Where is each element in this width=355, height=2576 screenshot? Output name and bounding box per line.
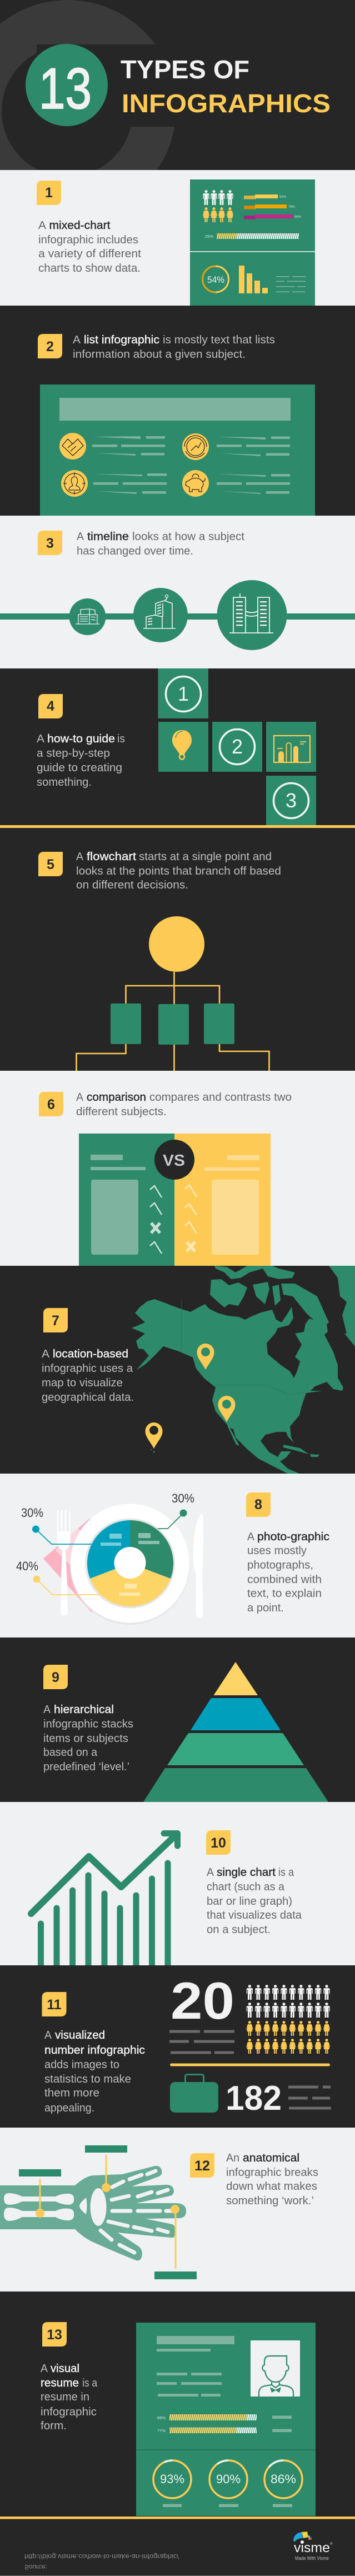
description 8: A [247, 1531, 255, 1543]
description 7: location-based [53, 1348, 128, 1360]
timeline node: medium building [133, 588, 188, 642]
description 8: text, to explain [247, 1587, 322, 1600]
description 10 [207, 1866, 302, 1936]
description 1 [38, 219, 141, 274]
description 11: adds images to [44, 2059, 119, 2071]
description 13: visual [51, 2363, 79, 2375]
description 4: something. [37, 776, 92, 788]
resume panel [136, 2323, 316, 2516]
horizontal bars: 78% [288, 206, 296, 209]
comparison panel right [174, 1134, 271, 1266]
description 5: starts at a single point and [139, 851, 272, 863]
description 12 [226, 2152, 318, 2207]
description 8: uses mostly [247, 1545, 307, 1557]
title: INFOGRAPHICS [122, 89, 331, 118]
callout hand [85, 2145, 127, 2192]
section 1: mixed chart [0, 170, 355, 306]
section 7: location-based [0, 1266, 355, 1474]
description 2: is mostly text that lists [163, 334, 275, 346]
badge 1: 1 [45, 185, 53, 201]
callout 30 percent left [21, 1506, 92, 1544]
description 4: is [117, 733, 125, 745]
ring 90 percent [202, 2453, 254, 2507]
description 7: geographical data. [42, 1391, 134, 1404]
step tile 1: 1 [178, 682, 189, 705]
description 13: form. [41, 2420, 67, 2432]
badge 4 [38, 694, 63, 718]
description 13: resume in [41, 2391, 89, 2403]
badge 6 [39, 1092, 63, 1116]
badge 3: 3 [46, 536, 54, 551]
description 10: single chart [217, 1866, 276, 1879]
description 13: A [41, 2363, 48, 2375]
description 1: charts to show data. [38, 262, 141, 274]
step tile 2: 2 [232, 735, 243, 758]
description 3: looks at how a subject [132, 531, 244, 543]
timeline node: small building [69, 598, 106, 635]
callout 30 percent right [158, 1491, 194, 1529]
callout finger [154, 2205, 197, 2279]
hatched progress bar [205, 233, 299, 239]
ring 86 percent [257, 2453, 310, 2507]
badge 10: 10 [211, 1835, 226, 1851]
map pin 3 [146, 1422, 162, 1449]
badge 7 [43, 1308, 68, 1332]
list panel [40, 385, 315, 516]
section 13: visual resume [0, 2292, 355, 2576]
section 10: single chart [0, 1802, 355, 1978]
description 1: a variety of different [38, 248, 141, 260]
step tile 1 [158, 668, 208, 718]
description 7 [42, 1348, 134, 1404]
callout 40 percent [16, 1559, 100, 1595]
badge 6: 6 [47, 1097, 55, 1112]
description 2: information about a given subject. [73, 348, 246, 361]
description 4: guide to creating [37, 762, 122, 774]
big number 20: 20 [171, 1971, 234, 2030]
description 11: number infographic [44, 2044, 145, 2056]
text placeholder lines right [288, 2086, 331, 2109]
description 9: hierarchical [54, 1704, 114, 1716]
description 2 [73, 334, 275, 361]
comparison panel left [79, 1134, 174, 1266]
section 4: how-to guide [0, 668, 355, 828]
section 3: timeline [0, 516, 355, 668]
badge 3 [38, 531, 62, 555]
description 10: on a subject. [207, 1924, 271, 1936]
description 12: infographic breaks [226, 2166, 318, 2179]
mirrored source text: http://blog.visme.co/how-to-make-an-infographic/ [24, 2553, 179, 2560]
description 11: statistics to make [44, 2073, 131, 2085]
description 1: infographic includes [38, 234, 138, 246]
callout 30 percent right: 30% [172, 1491, 194, 1505]
description 6 [76, 1091, 292, 1118]
text placeholder lines [169, 2030, 234, 2054]
ring 90 percent: 90% [216, 2472, 241, 2486]
description 2: A [73, 334, 81, 346]
description 7: map to visualize [42, 1377, 123, 1389]
description 7: infographic uses a [42, 1362, 133, 1375]
description 3: has changed over time. [77, 545, 193, 557]
callout 30 percent left: 30% [21, 1506, 43, 1520]
section 11: visualized number [0, 1965, 355, 2128]
section 12: anatomical [0, 2128, 355, 2292]
horizontal bars: 96% [294, 216, 302, 219]
section 8: photo-graphic [0, 1474, 355, 1638]
description 2: list infographic [84, 334, 159, 346]
skill bars: 77% [157, 2428, 166, 2433]
description 5: looks at the points that branch off based [76, 865, 281, 877]
decorative ring behind title [0, 0, 355, 226]
description 10: that visualizes data [207, 1909, 302, 1921]
step tile 2 [212, 722, 262, 772]
skill bars [157, 2414, 292, 2433]
text placeholder lines [276, 276, 306, 292]
pictogram rows [246, 1985, 330, 2054]
badge 7: 7 [52, 1313, 59, 1329]
list item: piggy bank [182, 470, 290, 497]
number 13 badge [26, 44, 108, 126]
pyramid [143, 1662, 328, 1802]
knife [193, 1513, 204, 1619]
number 13 badge: 13 [39, 57, 92, 121]
description 3 [77, 531, 244, 557]
tile: light bulb [158, 722, 208, 772]
hand x-ray [0, 2166, 186, 2260]
callout wrist [19, 2169, 61, 2218]
description 10: A [207, 1866, 214, 1879]
briefcase icon [170, 2075, 218, 2113]
description 10: is a [278, 1866, 294, 1879]
description 6: compares and contrasts two [149, 1091, 292, 1104]
description 12: something ‘work.’ [226, 2195, 314, 2207]
header section [0, 0, 355, 226]
description 11: A [44, 2029, 52, 2041]
yellow divider [0, 825, 355, 828]
54 percent ring [202, 266, 229, 292]
description 4: how-to guide [47, 733, 115, 745]
description 9: predefined ‘level.’ [43, 1761, 129, 1773]
map of North America [132, 1266, 355, 1474]
VS circle: VS [163, 1152, 185, 1170]
description 5 [76, 851, 281, 891]
ring 93 percent: 93% [160, 2472, 184, 2486]
description 6: A [76, 1091, 84, 1104]
map pin 1 [197, 1344, 214, 1370]
description 9: infographic stacks [43, 1718, 133, 1730]
badge 9 [43, 1665, 68, 1689]
yellow rule [170, 2064, 330, 2066]
title [121, 55, 331, 118]
description 11: them more [44, 2087, 99, 2099]
description 8: photo-graphic [257, 1531, 329, 1543]
step tile 3 [266, 776, 316, 825]
badge 2 [38, 334, 62, 358]
description 1: A [38, 219, 47, 232]
description 9: items or subjects [43, 1733, 128, 1745]
flowchart diagram [77, 916, 269, 1071]
timeline bar [0, 613, 355, 620]
hatched progress bar: 25% [205, 234, 213, 239]
badge 1 [37, 181, 61, 205]
description 13: infographic [41, 2406, 97, 2418]
plate pie chart [70, 1504, 190, 1625]
step tile 3: 3 [286, 789, 297, 812]
description 7: A [42, 1348, 50, 1360]
mirrored source text [24, 2553, 179, 2571]
description 12: anatomical [243, 2152, 299, 2164]
description 12: down what makes [226, 2180, 317, 2193]
map pin 2 [218, 1396, 236, 1422]
description 12: An [226, 2152, 239, 2164]
description 9 [43, 1704, 133, 1773]
badge 11 [42, 1992, 67, 2016]
badge 2: 2 [46, 339, 54, 355]
section 2: list infographic [0, 306, 355, 516]
description 8: combined with [247, 1574, 322, 1586]
badge 10 [206, 1830, 231, 1855]
description 13 [41, 2363, 98, 2432]
badge 4: 4 [47, 698, 54, 714]
description 8: photographs, [247, 1559, 313, 1571]
column and line chart [31, 1834, 178, 1978]
title: TYPES OF [121, 55, 249, 84]
badge 9: 9 [52, 1670, 59, 1685]
tile: chart icon [266, 722, 316, 772]
description 5: flowchart [87, 851, 136, 863]
section 5: flowchart [0, 828, 355, 1071]
list item: target person [61, 470, 167, 497]
list item: growth dial [182, 433, 290, 460]
description 4: a step-by-step [37, 747, 110, 760]
description 9: A [43, 1704, 51, 1716]
description 11 [44, 2029, 145, 2114]
description 6: different subjects. [76, 1106, 167, 1118]
pictogram people [203, 190, 233, 222]
description 5: on different decisions. [76, 879, 188, 891]
description 5: A [76, 851, 84, 863]
section 9: hierarchical [0, 1638, 355, 1802]
napkin [43, 1519, 142, 1613]
timeline node: twin towers [217, 580, 287, 650]
description 8: a point. [247, 1602, 284, 1614]
VS circle [154, 1140, 194, 1180]
description 11: appealing. [44, 2102, 94, 2114]
description 9: based on a [43, 1746, 98, 1759]
resume portrait [251, 2340, 300, 2397]
description 8 [247, 1531, 329, 1614]
resume heading lines [157, 2336, 234, 2397]
badge 12: 12 [194, 2158, 210, 2174]
visme logo [293, 2532, 333, 2562]
description 3: A [77, 531, 84, 543]
list item: handshake [59, 433, 165, 460]
description 4 [37, 733, 125, 788]
description 13: is a [82, 2377, 98, 2389]
description 10: bar or line graph) [207, 1895, 292, 1908]
flowchart start node [149, 916, 204, 972]
horizontal bars: 52% [279, 196, 287, 199]
small column chart [239, 266, 268, 293]
badge 5: 5 [47, 857, 54, 872]
mixed chart panel [189, 179, 315, 306]
yellow footer rule [0, 2517, 355, 2519]
badge 13: 13 [47, 2327, 62, 2343]
ring 93 percent [147, 2454, 197, 2507]
badge 8 [246, 1492, 271, 1517]
flowchart boxes [111, 1004, 234, 1045]
ring 86 percent: 86% [271, 2472, 296, 2486]
description 10: chart (such as a [207, 1881, 285, 1893]
badge 12 [190, 2153, 214, 2178]
skill bars: 89% [157, 2415, 166, 2420]
badge 5 [38, 852, 63, 876]
badge 8: 8 [254, 1497, 262, 1512]
54 percent ring: 54% [207, 274, 224, 285]
horizontal bars [244, 194, 302, 219]
visme logo: Made With Visme [295, 2555, 329, 2562]
number 182: 182 [226, 2079, 282, 2118]
description 11: visualized [55, 2029, 105, 2041]
badge 13 [42, 2322, 67, 2347]
description 6: comparison [87, 1091, 146, 1104]
mirrored source text: Source: [24, 2563, 47, 2571]
description 3: timeline [87, 531, 129, 543]
description 4: A [37, 733, 45, 745]
visme logo: ® [330, 2542, 333, 2546]
badge 11: 11 [47, 1997, 62, 2013]
description 1: mixed-chart [49, 219, 111, 232]
fork [57, 1510, 71, 1616]
description 13: resume [41, 2377, 79, 2389]
section 6: comparison [0, 1071, 355, 1266]
callout 40 percent: 40% [16, 1559, 38, 1573]
visme logo: visme [294, 2540, 330, 2555]
